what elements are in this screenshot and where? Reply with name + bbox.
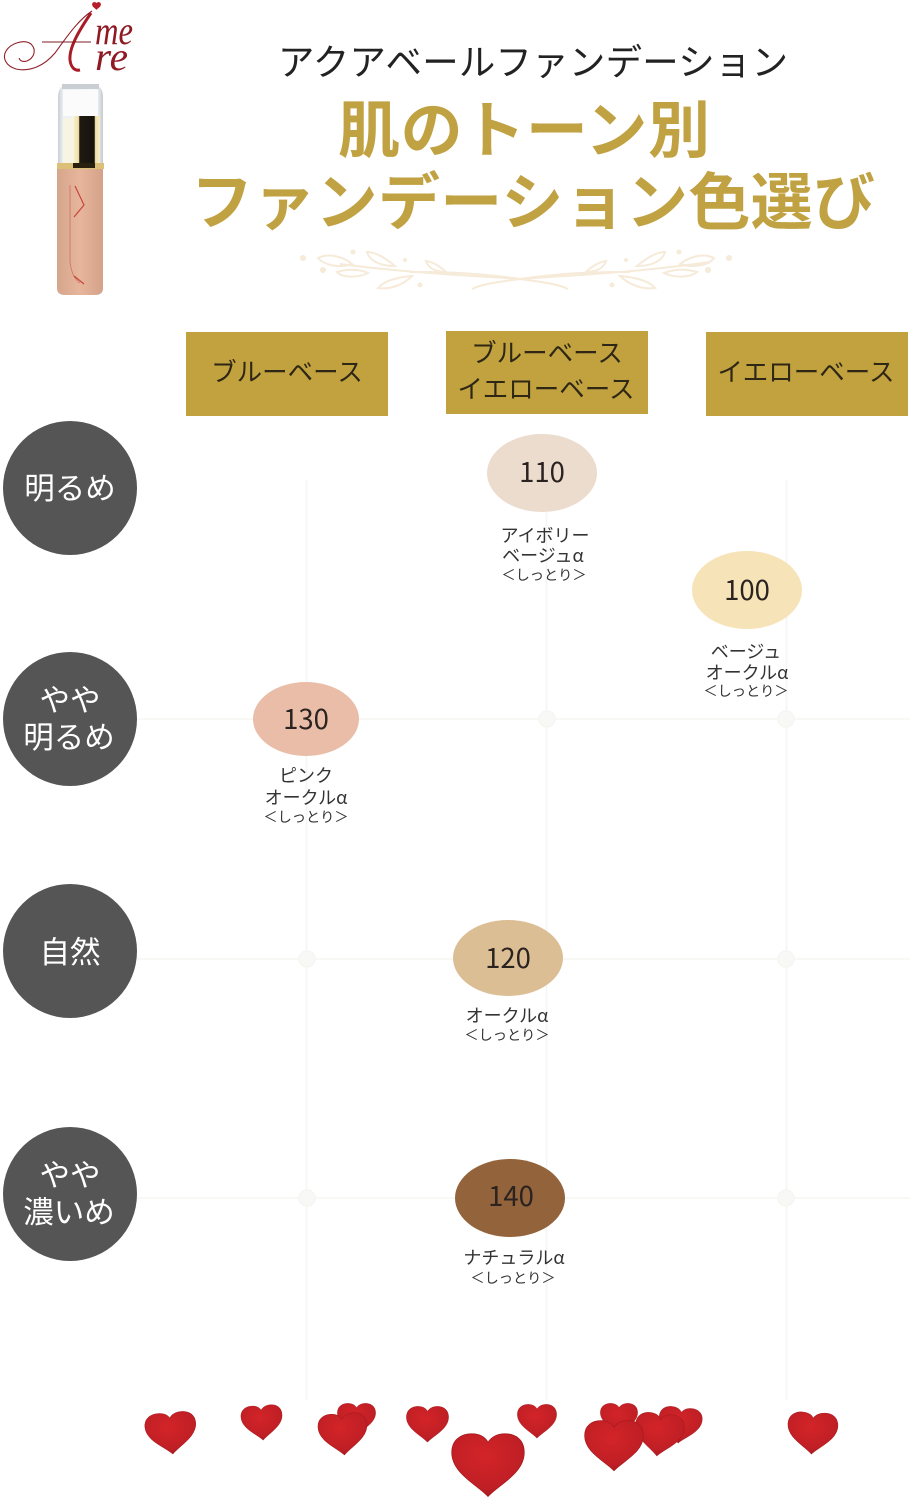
shade 140: ナチュラルα xyxy=(463,1244,565,1270)
shade 110: 110 xyxy=(519,450,565,490)
title xyxy=(191,80,875,242)
row label: slightly light xyxy=(3,652,137,786)
row label: light xyxy=(3,421,137,555)
row label: light: 明るめ xyxy=(24,464,116,508)
shade 120 xyxy=(453,920,563,1045)
shade 130: ピンク xyxy=(279,762,333,788)
shade 110: ＜しっとり＞ xyxy=(501,565,587,585)
logo: Ame Are xyxy=(4,2,133,79)
row label: slightly light: やや xyxy=(40,676,100,720)
title: 肌のトーン別 xyxy=(338,80,710,170)
shade 140 xyxy=(455,1159,565,1288)
shade 100: ＜しっとり＞ xyxy=(703,681,789,701)
shade 140: 140 xyxy=(488,1174,534,1214)
shade 100 xyxy=(692,551,802,701)
icon: foundation bottle xyxy=(57,84,104,295)
row label: natural xyxy=(3,884,137,1018)
column header: blue base xyxy=(186,332,388,416)
shade 110: アイボリー xyxy=(500,522,590,548)
logo: Ame Are: re xyxy=(95,34,128,79)
row label: slightly dark: やや xyxy=(40,1151,100,1195)
shade 100: ベージュ xyxy=(711,638,781,664)
shade 130: 130 xyxy=(283,697,329,737)
shade 140: ＜しっとり＞ xyxy=(470,1268,556,1288)
shade 130: ＜しっとり＞ xyxy=(263,807,349,827)
decorative hearts row xyxy=(144,1403,839,1497)
shade 100: オークルα xyxy=(706,659,788,685)
column header: yellow base: イエローベース xyxy=(718,352,894,389)
logo: Ame Are: me xyxy=(95,8,133,53)
column header: blue base: ブルーベース xyxy=(211,352,363,389)
row label: natural: 自然 xyxy=(40,928,100,972)
shade 110: ベージュα xyxy=(502,542,584,568)
shade 130 xyxy=(253,682,359,827)
column header: blue and yellow base xyxy=(446,331,648,414)
shade 100: 100 xyxy=(724,568,770,608)
title: ファンデーション色選び xyxy=(191,152,875,242)
shade 110 xyxy=(487,434,597,585)
row label: slightly dark: 濃いめ xyxy=(23,1188,115,1232)
column header: blue and yellow base: イエローベース xyxy=(458,369,634,406)
row label: slightly light: 明るめ xyxy=(23,713,115,757)
row label: slightly dark xyxy=(3,1127,137,1261)
shade 120: ＜しっとり＞ xyxy=(464,1025,550,1045)
grid lines xyxy=(137,480,910,1400)
shade 120: オークルα xyxy=(466,1002,548,1028)
column header: yellow base xyxy=(706,332,908,416)
shade 120: 120 xyxy=(485,936,531,976)
column header: blue and yellow base: ブルーベース xyxy=(471,333,623,370)
shade 130: オークルα xyxy=(265,784,347,810)
decorative laurel flourish xyxy=(300,250,732,289)
subtitle: アクアベールファンデーション xyxy=(278,34,788,86)
